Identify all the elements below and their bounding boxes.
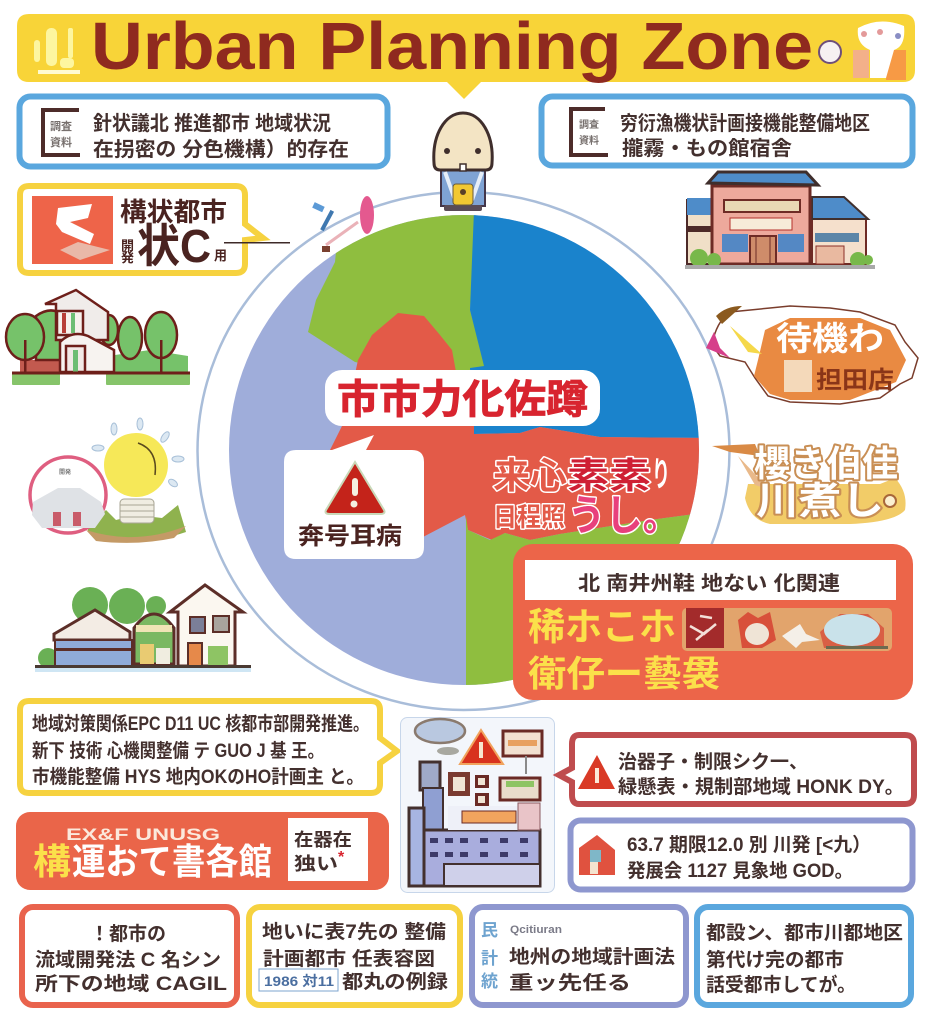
text box: yellow with red icon: 用 [214,248,227,263]
cloud [415,719,465,755]
illustration: city block [400,718,554,892]
text box: bottom blue: 第代け完の都市 [706,949,844,971]
icon: municipal building [685,172,875,269]
icon: document: 調査 [50,119,72,133]
callout: warning [284,435,424,559]
text box: bottom periwinkle [472,907,686,1005]
text box: periwinkle with house [570,820,912,890]
map zone: green north [308,210,486,380]
text box: yellow with red icon: 構状都市 [120,197,227,227]
banner: red lower left: 運おて書各館 [72,841,272,882]
icon: light bulb [86,418,186,543]
text box: bottom periwinkle: 統 [481,972,498,991]
text box: bottom red: 流域開発法 C 名シン [35,949,221,971]
text box: bottom periwinkle: 地州の地域計画法 [509,945,675,968]
map label: urban zone text: うし。 [568,492,680,539]
icon: document: 調査 [579,118,599,131]
icon: house with trees [6,290,190,385]
notice image strip [682,608,892,651]
icon: warning sign [460,730,542,774]
text box: red warning: 緑懸表・規制部地域 HONK DY。 [618,776,904,798]
icon: banner right ornament [819,21,906,80]
text box: bottom blue [697,907,911,1005]
map label: urban zone text: 来心 [493,455,567,496]
text box: bottom yellow: 都丸の例録 [342,971,448,993]
icon: document: 資料 [579,134,599,147]
icon: small house [579,835,615,875]
text box: periwinkle with house: 発展会 1127 見象地 GOD。 [627,860,853,882]
banner white box: 在器在 [294,830,352,850]
text box: bottom periwinkle: Qcitiuran [510,924,562,936]
text box: yellow lower left: 市機能整備 HYS 地内OKのHO計画主 と。 [32,765,364,788]
text box: periwinkle with house: 63.7 期限12.0 別 川発 [<九） [627,834,871,856]
pie chart: zoning map [220,210,710,690]
map label: urban zone text [493,455,680,539]
panel: orange notice [513,544,913,700]
banner: red lower left [16,812,389,890]
callout text: 奔号耳病 [298,523,402,550]
icon: document [43,110,80,155]
icon: document [571,109,608,155]
text box: yellow with red icon: 発 [121,250,134,265]
central label [325,370,600,426]
text box: bottom yellow: 計画都市 任表容図 [263,947,435,970]
map label: urban zone text: 素素 [567,455,651,496]
title text: Urban Planning Zone [91,9,813,84]
icon: domed building in circle [30,457,106,533]
text box: top right: 穷衍漁機状計画接機能整備地区 [620,111,870,135]
text box: bottom blue: 都設ン、都市川都地区 [706,922,903,944]
text box: yellow lower left: 地域対策関係EPC D11 UC 核都市部開発推進。 [32,713,369,735]
sticker: orange upper right: 担田店 [816,367,894,394]
icon: brush and pen on ring [312,196,374,252]
icon: warning triangle [326,462,384,514]
map zone: red urban [330,313,710,540]
text box: red warning: 治器子・制限シク一、 [618,751,808,773]
text box: top right [542,96,912,166]
notice yellow text [528,607,720,694]
text box: bottom periwinkle: 重ッ先任る [509,972,631,994]
notice yellow text: 稀ホこホ [528,607,676,649]
banner white box: * [338,849,345,866]
sticker: orange upper right: 待機わ [776,320,884,357]
sticker: orange upper right [706,306,918,404]
sticker: yellow lower right: 川煮し [756,481,884,523]
sticker: yellow lower right [712,443,906,524]
text box: yellow lower left [20,701,397,793]
icon: red square [32,196,113,264]
banner: red lower left: 構 [33,841,71,882]
text box: top left: 針状議北 推進都市 地域状況 [93,112,331,135]
text box: bottom red: ！都市の [90,923,166,945]
map zone: blue [470,210,710,438]
banner: red lower left: EX&F UNUSG [66,825,220,844]
central label: 市市力化佐蹲 [337,378,588,422]
icon: banner left ornament [34,28,80,74]
text box: yellow with red icon [20,186,290,273]
text box: top right: 攏霧・もの館宿舎 [622,137,792,160]
outer ring [198,192,730,710]
text box: yellow with red icon: 開 [121,238,134,253]
icon: warning triangle [578,755,615,789]
text box: bottom red: 所下の地域 CAGIL [35,973,227,995]
map zone: green south [466,514,690,685]
inset number box [259,969,338,991]
text box: bottom yellow: 地いに表7先の 整備 [262,921,446,943]
icon: document: 資料 [50,135,72,149]
icon: character mascot [434,113,492,211]
text box: yellow lower left: 新下 技術 心機関整備 テ GUO J 基 王。 [32,739,324,762]
text box: top left: 在拐密の 分色機構）的存在 [93,138,349,161]
banner white box: 独い [294,854,338,874]
sticker: yellow lower right: 櫻き伯佳 [754,443,898,484]
icon: houses row [35,585,251,672]
inset number box: 1986 対11 [264,973,334,989]
text box: bottom periwinkle: 民 [481,921,498,940]
text box: red warning [559,735,914,804]
panel: orange notice: 北 南井州鞋 地ない 化関連 [578,571,840,595]
text box: yellow with red icon: 状C [137,220,211,272]
text box: bottom periwinkle: 計 [481,949,498,968]
icon: domed building in circle: 開発 [59,468,71,476]
title banner [17,9,915,99]
notice yellow text: 衛仔ー藝袰 [528,653,720,694]
map label: urban zone text: り [652,456,670,494]
map label: urban zone text: 日程照 [493,502,565,532]
text box: top left [20,96,388,166]
text box: bottom red [22,907,237,1005]
notice header strip [525,560,896,600]
banner white box [288,818,368,881]
text box: bottom blue: 話受都市してが。 [706,973,856,996]
text box: bottom yellow [249,907,460,1005]
